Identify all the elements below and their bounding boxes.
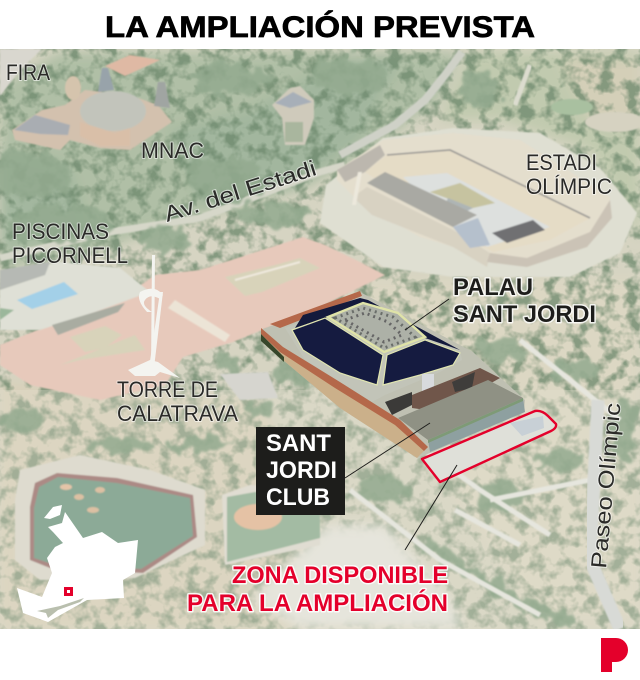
- back brick edge: [270, 291, 362, 328]
- label: Torre de Calatrava: [117, 377, 238, 426]
- zona disponible area: [422, 411, 556, 482]
- locator marker: [64, 587, 73, 596]
- plaza: pink esplanade: [0, 237, 385, 400]
- stadium: east facade: [487, 200, 612, 267]
- logo: [601, 638, 628, 672]
- dark left panel: [292, 318, 383, 385]
- tan facade: [261, 332, 428, 458]
- building base: [261, 292, 525, 458]
- label: Estadi Olimpic: OLÍMPIC: [526, 174, 612, 199]
- label: Palau Sant Jordi: [453, 274, 596, 328]
- label: Palau Sant Jordi: PALAU: [453, 274, 533, 301]
- piscinas picornell complex: [0, 262, 150, 335]
- open ground: [250, 525, 465, 629]
- building: pavilion: [272, 86, 314, 145]
- label: MNAC: MNAC: [141, 138, 204, 163]
- terrain: green hillside: [0, 49, 640, 269]
- stadium: outer ring: [320, 128, 637, 277]
- paths lower right: [350, 340, 620, 615]
- label: Zona disponible para la ampliacion: ZONA DISPONIBLE: [232, 562, 448, 589]
- label: Av. del Estadi: Av. del Estadi: [161, 155, 319, 227]
- paseo olimpic road: [590, 400, 620, 629]
- light wash over lower ground: [0, 390, 640, 630]
- palau sant jordi building: [261, 291, 525, 458]
- training field top right: [551, 99, 593, 115]
- baseball field small: [222, 485, 320, 565]
- baseball field large: [15, 455, 205, 580]
- leader line: Palau: [405, 299, 449, 330]
- label: Zona disponible para la ampliacion: PARA LA AMPLIACIÓN: [187, 589, 448, 617]
- stadium: outer wall: [336, 148, 370, 176]
- brick roof edge: [261, 328, 428, 451]
- fira corner: [0, 49, 42, 96]
- label: Paseo Olimpic: Paseo Olímpic: [586, 402, 625, 569]
- label: Torre de Calatrava: CALATRAVA: [117, 401, 238, 426]
- building: MNAC palace: [12, 55, 172, 150]
- label: Estadi Olimpic: ESTADI: [526, 150, 597, 175]
- sant jordi club building: [398, 380, 525, 452]
- dark corner: [261, 334, 284, 362]
- stadium: pitch: [403, 173, 550, 247]
- label box: Sant Jordi Club: JORDI: [266, 457, 337, 484]
- leader line: Sant Jordi Club: [345, 423, 430, 478]
- stadium: inner bowl: [365, 150, 590, 252]
- stadium: tower and west stand: [337, 145, 385, 182]
- label box: Sant Jordi Club: [256, 427, 345, 515]
- label: Torre de Calatrava: TORRE DE: [117, 377, 218, 402]
- avenue road: [0, 165, 345, 258]
- label: Piscinas Picornell: PICORNELL: [12, 243, 128, 268]
- label: Palau Sant Jordi: SANT JORDI: [453, 301, 596, 328]
- tower and machinery: [422, 374, 434, 392]
- title: LA AMPLIACIÓN PREVISTA: [105, 10, 535, 44]
- label: Zona disponible para la ampliacion: [187, 562, 448, 617]
- stadium: main stand: [367, 172, 477, 227]
- label box: Sant Jordi Club: CLUB: [266, 484, 330, 511]
- red outline: [422, 411, 556, 482]
- label: Piscinas Picornell: [12, 219, 128, 268]
- label box: Sant Jordi Club: SANT: [266, 430, 331, 457]
- parking lot grey: [220, 372, 278, 400]
- label: Estadi Olimpic: [526, 150, 612, 199]
- dark back panels: [295, 298, 460, 350]
- leader line: Zona disponible: [405, 465, 457, 550]
- locator map: Barcelona: [17, 505, 138, 622]
- dark right panel: [383, 340, 460, 385]
- torre de calatrava: [128, 255, 180, 378]
- upper road: [340, 52, 462, 155]
- roof skirt: [328, 296, 364, 398]
- grey dome: [328, 303, 425, 352]
- label: Piscinas Picornell: PISCINAS: [12, 219, 109, 244]
- label: Fira: FIRA: [6, 60, 50, 85]
